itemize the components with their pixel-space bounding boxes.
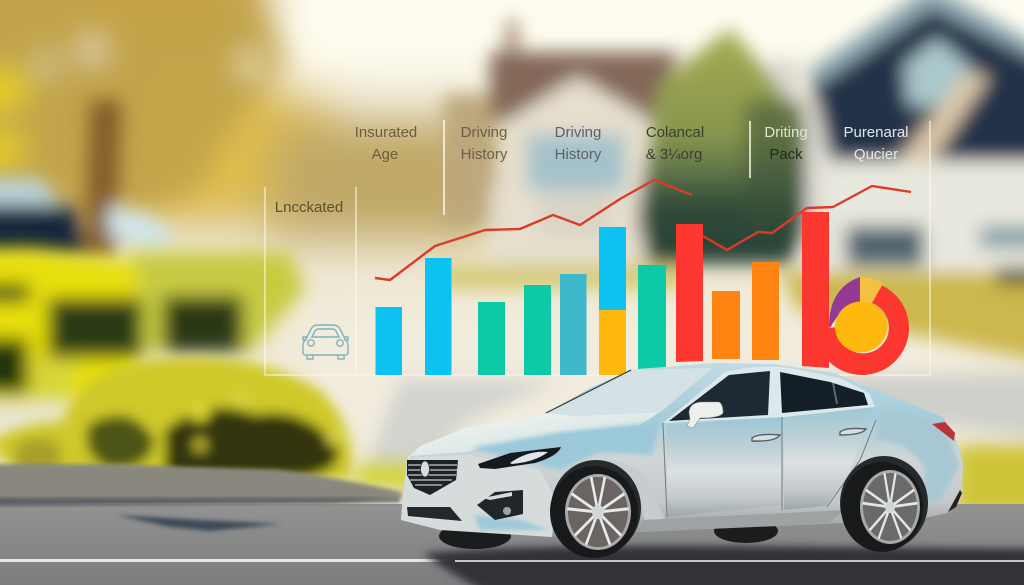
window trim	[663, 367, 875, 423]
front bush	[0, 357, 352, 480]
front bumper	[401, 455, 556, 537]
label: Driting Pack	[764, 124, 808, 163]
chart frame lines	[265, 120, 930, 375]
label: Colancal: & 3¼org	[646, 146, 702, 163]
door handles	[752, 428, 866, 441]
label: Purenaral Qucier: Qucier	[854, 146, 898, 163]
label: Colancal	[646, 124, 704, 163]
icon: outline car	[303, 325, 348, 359]
rear quarter	[875, 410, 960, 505]
label: Driving History 2	[555, 124, 602, 163]
sky and soft colour fields	[0, 0, 1024, 450]
rear door	[784, 405, 874, 510]
hedges	[0, 248, 305, 432]
curb shadow	[0, 498, 400, 506]
trend line left	[375, 180, 692, 280]
trend line right	[703, 186, 911, 250]
windshield	[546, 368, 712, 416]
bumper reflection	[474, 515, 550, 530]
front window	[669, 371, 770, 421]
donut chart	[829, 277, 909, 375]
rear window	[780, 372, 868, 413]
label: Insurated Age: Age	[372, 146, 398, 163]
label: Colancal: Colancal	[646, 124, 704, 141]
sill	[642, 510, 845, 532]
car shadow	[424, 546, 1024, 585]
label: Driving History 2: Driving	[555, 124, 601, 141]
tree shadow on road	[115, 515, 282, 531]
label: Insurated Age: Insurated	[355, 124, 417, 141]
label: Driving History 2: History	[555, 146, 602, 163]
column labels	[275, 124, 909, 216]
road	[0, 504, 1024, 585]
label: Purenaral Qucier: Purenaral	[843, 124, 909, 141]
rear bumper dark	[948, 490, 962, 512]
tree foliage	[0, 0, 285, 215]
car	[401, 363, 963, 558]
label: Driving History 1: History	[461, 146, 508, 163]
front wheel	[550, 466, 638, 558]
label: Driving History 1: Driving	[461, 124, 507, 141]
label: Driving History 1	[461, 124, 508, 163]
label: Driting Pack: Driting	[764, 124, 808, 141]
door lines	[663, 417, 876, 517]
label: Driting Pack: Pack	[769, 146, 803, 163]
grille	[407, 460, 458, 495]
fog lamp	[477, 490, 523, 520]
road line	[0, 559, 1024, 562]
label: Lncckated: Lncckated	[275, 199, 343, 216]
tail light	[932, 422, 955, 441]
road line over shadow	[455, 560, 1024, 562]
far wheels	[439, 519, 778, 549]
label: Purenaral Qucier	[843, 124, 909, 163]
fender reflection	[470, 420, 660, 470]
hood highlight	[408, 412, 660, 458]
front wheel arch	[551, 460, 641, 556]
bar chart	[376, 212, 829, 375]
mirror	[687, 402, 723, 428]
curb	[0, 464, 402, 504]
lower intake	[407, 507, 462, 521]
label: Insurated Age	[355, 124, 417, 163]
front door	[667, 417, 782, 517]
rear wheel arch	[840, 456, 928, 550]
headlight	[478, 447, 561, 469]
rear wheel	[841, 462, 923, 552]
car body	[401, 363, 963, 537]
